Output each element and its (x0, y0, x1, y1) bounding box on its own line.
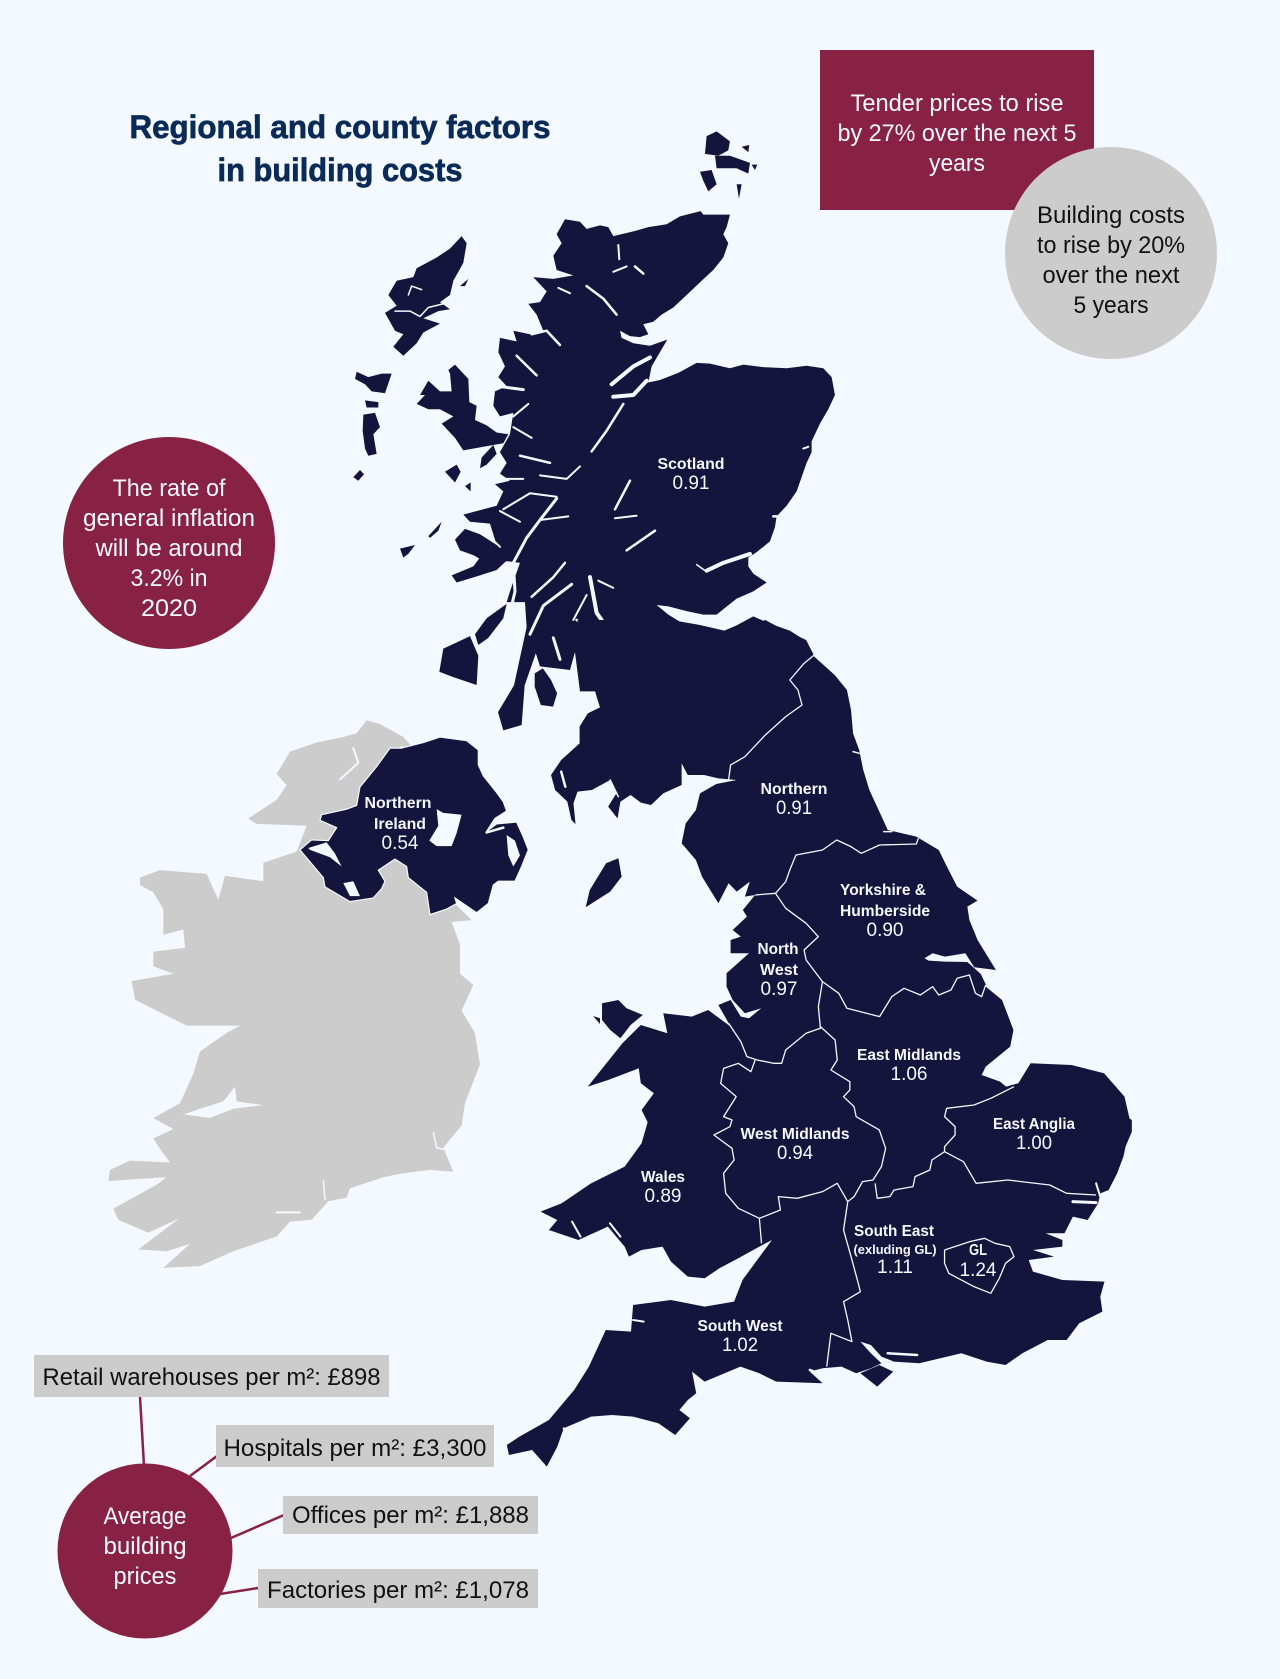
title (130, 109, 550, 188)
label: Wales (641, 1169, 685, 1207)
label: Northern Ireland: Ireland (374, 816, 426, 833)
label: Yorkshire and Humberside (840, 882, 930, 941)
Anglesey (593, 1000, 643, 1038)
callout: general inflation: The rate of (112, 475, 226, 502)
label: South East (854, 1223, 936, 1278)
label: South West: South West (698, 1318, 783, 1335)
callout: building costs: Building costs (1037, 202, 1185, 229)
callout: building costs: over the next (1042, 262, 1180, 289)
label: GL (960, 1242, 997, 1281)
Outer Hebrides (353, 236, 468, 481)
Isle of Wight (860, 1365, 893, 1387)
label: Yorkshire and Humberside: Humberside (840, 903, 930, 920)
circle: average building prices: building (104, 1533, 186, 1560)
label: Northern Ireland (364, 795, 432, 854)
label: West Midlands: West Midlands (740, 1126, 850, 1143)
price label: retail warehouses: Retail warehouses per m²: £898 (42, 1364, 380, 1391)
price label: retail warehouses (34, 1355, 389, 1397)
map: southern England and south Wales (507, 1087, 1132, 1467)
label: Scotland: Scotland (658, 456, 724, 473)
price label: offices (283, 1496, 538, 1534)
circle: average building prices: Average (104, 1503, 186, 1530)
label: North West: North (758, 941, 798, 958)
Arran (535, 668, 557, 707)
price label: factories (258, 1569, 538, 1608)
label: Yorkshire and Humberside: 0.90 (866, 920, 904, 941)
label: GL: GL (969, 1242, 987, 1259)
map: northern England and Wales north (535, 620, 1131, 1123)
label: Northern Ireland: 0.54 (382, 833, 419, 854)
callout: tender prices (820, 50, 1094, 210)
label: Scotland: 0.91 (672, 473, 710, 494)
label: South East: (exluding GL) (854, 1242, 936, 1257)
label: Northern (760, 781, 828, 819)
callout: building costs: 5 years (1074, 292, 1148, 319)
label: West Midlands: 0.94 (777, 1143, 813, 1164)
Lough Foyle (377, 745, 403, 767)
title: Regional and county factors (130, 109, 550, 145)
circle: average building prices: prices (114, 1563, 176, 1590)
region boundary lines (714, 655, 1096, 1367)
label: North West (758, 941, 799, 1000)
callout: tender prices: by 27% over the next 5 (838, 120, 1076, 147)
label: GL: 1.24 (960, 1260, 997, 1281)
label: Northern Ireland: Northern (364, 795, 432, 812)
price label: factories: Factories per m²: £1,078 (267, 1577, 529, 1604)
callout: tender prices: Tender prices to rise (850, 90, 1064, 117)
callout: general inflation (63, 437, 275, 649)
label: Yorkshire and Humberside: Yorkshire & (840, 882, 926, 899)
callout: general inflation: 3.2% in (130, 565, 208, 592)
price label: offices: Offices per m²: £1,888 (292, 1502, 529, 1529)
label: South East: 1.11 (877, 1257, 913, 1278)
Isle of Man (586, 858, 622, 907)
label: Northern: 0.91 (776, 798, 812, 819)
title: in building costs (218, 152, 462, 188)
region labels (364, 456, 1075, 1356)
label: North West: 0.97 (760, 979, 798, 1000)
label: East Midlands: East Midlands (857, 1047, 961, 1064)
label: East Midlands: 1.06 (890, 1064, 928, 1085)
label: South West: 1.02 (722, 1335, 758, 1356)
map: Scotland region (353, 131, 835, 730)
label: Wales: Wales (641, 1169, 685, 1186)
label: Northern: Northern (760, 781, 828, 798)
callout: building costs: to rise by 20% (1037, 232, 1185, 259)
panel: average building prices (34, 1355, 538, 1638)
label: South East: South East (854, 1223, 935, 1240)
label: North West: West (760, 962, 799, 979)
label: South West (698, 1318, 783, 1356)
Kintyre peninsula (498, 600, 546, 730)
Skye and Inner Hebrides (400, 365, 510, 685)
price label: hospitals (216, 1425, 494, 1467)
connector lines (140, 1397, 284, 1594)
callout: general inflation: general inflation (83, 505, 255, 532)
label: East Anglia: East Anglia (993, 1116, 1075, 1133)
callout: tender prices: years (929, 150, 985, 177)
callout: general inflation: 2020 (141, 595, 197, 622)
label: East Midlands (857, 1047, 961, 1085)
callout: general inflation: will be around (95, 535, 242, 562)
label: West Midlands (740, 1126, 850, 1164)
label: Scotland (658, 456, 724, 494)
label: Wales: 0.89 (644, 1186, 682, 1207)
Orkney islands (700, 131, 757, 199)
map: Northern Ireland region (300, 737, 528, 915)
map of Ireland (grey) (108, 720, 480, 1268)
price label: hospitals: Hospitals per m²: £3,300 (224, 1435, 486, 1462)
label: East Anglia: 1.00 (1016, 1133, 1052, 1154)
circle: average building prices (58, 1464, 232, 1638)
label: East Anglia (993, 1116, 1075, 1154)
callout: building costs (1005, 147, 1217, 359)
